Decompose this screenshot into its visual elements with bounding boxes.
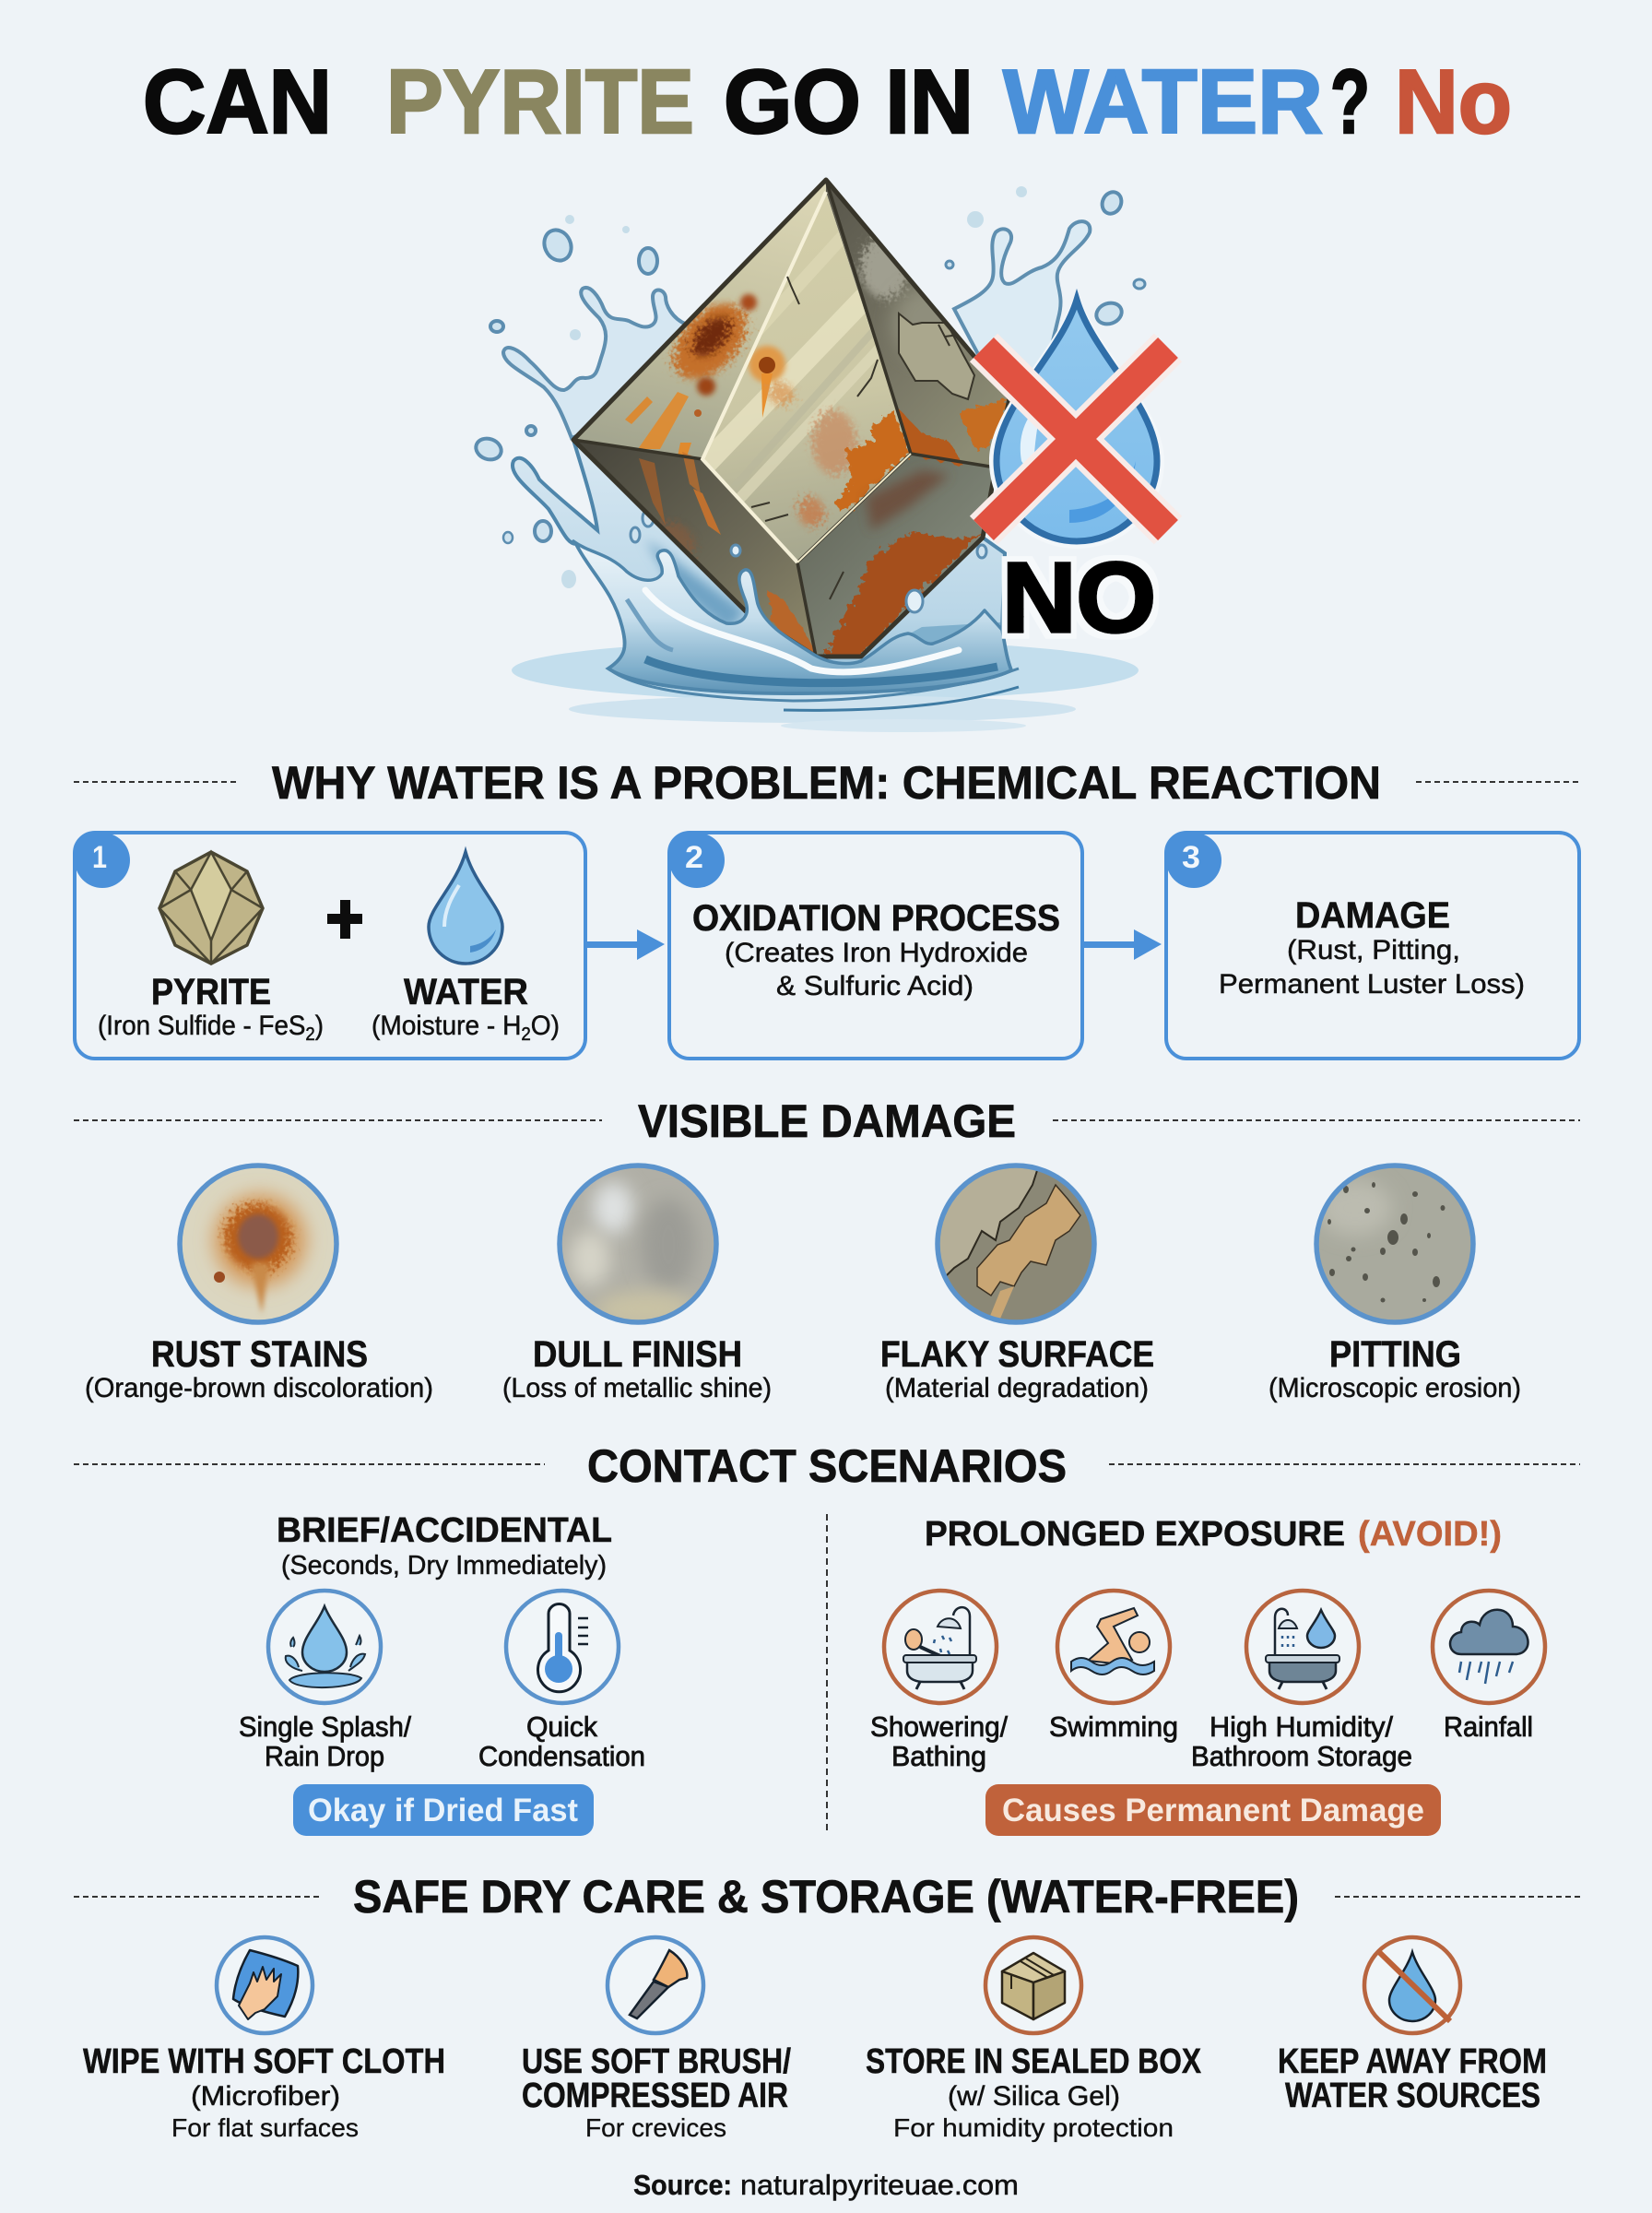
- brief accidental heading: (Seconds, Dry Immediately): [281, 1551, 607, 1580]
- scenario labels: [239, 1710, 645, 1772]
- scenario labels: Quick: [526, 1710, 597, 1743]
- panel: brief accidental: [239, 1511, 645, 1836]
- wipe label: For flat surfaces: [171, 2113, 359, 2142]
- NO label: NO: [1002, 541, 1156, 653]
- box label: STORE IN SEALED BOX: [866, 2042, 1202, 2081]
- icon: rainfall: [1433, 1591, 1545, 1703]
- pyrite label: [98, 972, 324, 1045]
- brush label: For crevices: [585, 2113, 726, 2142]
- panel: soft brush: [522, 1937, 791, 2142]
- keep away label: WATER SOURCES: [1285, 2077, 1540, 2115]
- damage text: DAMAGE: [1295, 895, 1450, 936]
- scenario labels: [870, 1710, 1533, 1772]
- brief accidental heading: [277, 1511, 612, 1580]
- icon: cloth and hand: [217, 1937, 313, 2033]
- icon: single splash: [268, 1591, 381, 1703]
- panel: step 3 damage: [1166, 833, 1579, 1059]
- icon: dull finish photo: [553, 1162, 719, 1328]
- icon: plus sign: [327, 900, 362, 939]
- flaky surface label: [880, 1334, 1154, 1403]
- brush label: [522, 2042, 791, 2142]
- source line: [633, 2169, 1019, 2201]
- rust stains label: (Orange-brown discoloration): [85, 1373, 433, 1403]
- panel: pitting: [1268, 1162, 1521, 1403]
- heading: visible damage: VISIBLE DAMAGE: [638, 1095, 1016, 1147]
- scenario labels: Bathroom Storage: [1191, 1740, 1412, 1772]
- prolonged exposure heading: PROLONGED EXPOSURE: [925, 1515, 1345, 1554]
- badge 2: 2: [685, 840, 703, 875]
- box label: (w/ Silica Gel): [948, 2081, 1120, 2112]
- pitting label: [1268, 1334, 1521, 1403]
- water splash behind pyrite: [473, 186, 1145, 732]
- scenario labels: Single Splash/: [239, 1710, 411, 1743]
- icon: high humidity bathroom: [1246, 1591, 1359, 1703]
- panel: keep away from water: [1278, 1937, 1547, 2115]
- title: No: [1395, 51, 1512, 152]
- pyrite label: (Iron Sulfide - FeS: [98, 1011, 322, 1041]
- icon: brush: [608, 1937, 703, 2033]
- prolonged exposure heading: (AVOID!): [1358, 1515, 1502, 1554]
- icon: rust stain photo: [175, 1162, 341, 1328]
- hero illustration: rusting pyrite in water splash: [473, 180, 1168, 732]
- title: GO IN: [724, 51, 974, 152]
- flaky surface label: FLAKY SURFACE: [880, 1334, 1154, 1375]
- box label: [866, 2042, 1202, 2142]
- dull finish label: DULL FINISH: [533, 1334, 742, 1375]
- panel: flaky surface: [880, 1162, 1154, 1403]
- icon: flaky surface photo: [931, 1162, 1097, 1328]
- water label: (Moisture - H: [372, 1011, 531, 1041]
- heading: contact scenarios: CONTACT SCENARIOS: [587, 1440, 1067, 1492]
- oxidation text: & Sulfuric Acid): [776, 971, 974, 1001]
- scenario labels: Swimming: [1049, 1710, 1178, 1743]
- badge: okay if dried fast: [293, 1784, 594, 1836]
- icon: pyrite gem: [159, 852, 263, 964]
- icon: water drop: [429, 852, 502, 964]
- icon: crossed water drop: [1364, 1937, 1460, 2033]
- keep away label: [1278, 2042, 1547, 2115]
- oxidation text: [692, 898, 1060, 1001]
- title: [143, 51, 1512, 152]
- keep away label: KEEP AWAY FROM: [1278, 2042, 1547, 2081]
- badge 1: [75, 833, 130, 888]
- dull finish label: (Loss of metallic shine): [502, 1373, 772, 1403]
- source line: naturalpyriteuae.com: [740, 2169, 1019, 2201]
- oxidation text: OXIDATION PROCESS: [692, 898, 1060, 939]
- flaky surface label: (Material degradation): [885, 1373, 1149, 1403]
- badge: causes permanent damage: Causes Permanent Damage: [1002, 1793, 1424, 1828]
- wipe label: [83, 2042, 445, 2142]
- icon: pitting photo: [1309, 1162, 1475, 1328]
- heading: why water is a problem: WHY WATER IS A PROBLEM: CHEMICAL REACTION: [272, 757, 1381, 809]
- brief accidental heading: BRIEF/ACCIDENTAL: [277, 1511, 612, 1550]
- pitting label: PITTING: [1329, 1334, 1461, 1375]
- foreground water at base of cube: [573, 541, 1019, 710]
- pitting label: (Microscopic erosion): [1268, 1373, 1521, 1403]
- brush label: COMPRESSED AIR: [522, 2077, 788, 2115]
- badge: causes permanent damage: [985, 1784, 1441, 1836]
- water label: WATER: [404, 972, 528, 1012]
- pyrite label: ): [315, 1011, 324, 1041]
- icon: cardboard box: [985, 1937, 1081, 2033]
- pyrite label: 2: [305, 1024, 315, 1045]
- title: CAN: [143, 51, 332, 152]
- scenario labels: Showering/: [870, 1710, 1008, 1743]
- icon: showering: [884, 1591, 997, 1703]
- pyrite label: PYRITE: [151, 972, 271, 1012]
- crossed-out water drop: [984, 288, 1168, 549]
- arrow: step 2 to 3: [1082, 929, 1162, 960]
- source line: Source:: [633, 2169, 732, 2201]
- arrow: step 1 to 2: [585, 929, 665, 960]
- water label: [372, 972, 560, 1045]
- scenario labels: Rain Drop: [265, 1740, 384, 1772]
- wipe label: WIPE WITH SOFT CLOTH: [83, 2042, 445, 2081]
- title: ?: [1330, 51, 1370, 152]
- scenario labels: High Humidity/: [1210, 1710, 1393, 1743]
- damage text: (Rust, Pitting,: [1287, 935, 1460, 965]
- rust stains label: RUST STAINS: [151, 1334, 368, 1375]
- badge 3: [1166, 833, 1221, 888]
- panel: prolonged exposure: [870, 1515, 1545, 1836]
- badge 3: 3: [1182, 840, 1200, 875]
- dull finish label: [502, 1334, 772, 1403]
- damage text: [1219, 895, 1525, 1000]
- scenario labels: Condensation: [478, 1740, 645, 1772]
- rust stains label: [85, 1334, 433, 1403]
- damage text: Permanent Luster Loss): [1219, 969, 1525, 1000]
- icon: thermometer: [506, 1591, 619, 1703]
- wipe label: (Microfiber): [191, 2081, 340, 2112]
- badge 1: 1: [92, 840, 107, 875]
- panel: dull finish: [502, 1162, 772, 1403]
- panel: step 1 pyrite plus water: [75, 833, 585, 1059]
- box label: For humidity protection: [893, 2113, 1174, 2142]
- badge 2: [669, 833, 725, 888]
- panel: step 2 oxidation: [669, 833, 1082, 1059]
- heading: safe dry care and storage: SAFE DRY CARE & STORAGE (WATER-FREE): [353, 1871, 1299, 1923]
- panel: rust stains: [85, 1162, 433, 1403]
- scenario labels: Rainfall: [1444, 1710, 1533, 1743]
- pyrite cube: [573, 180, 1009, 657]
- water label: O): [531, 1011, 560, 1041]
- badge: okay if dried fast: Okay if Dried Fast: [308, 1793, 578, 1828]
- title: PYRITE: [386, 51, 694, 152]
- panel: sealed box: [866, 1937, 1202, 2142]
- title: WATER: [1003, 51, 1323, 152]
- water label: 2: [521, 1024, 531, 1045]
- panel: wipe with soft cloth: [83, 1937, 445, 2142]
- icon: swimming: [1057, 1591, 1170, 1703]
- oxidation text: (Creates Iron Hydroxide: [725, 938, 1028, 968]
- brush label: USE SOFT BRUSH/: [522, 2042, 791, 2081]
- scenario labels: Bathing: [891, 1740, 986, 1772]
